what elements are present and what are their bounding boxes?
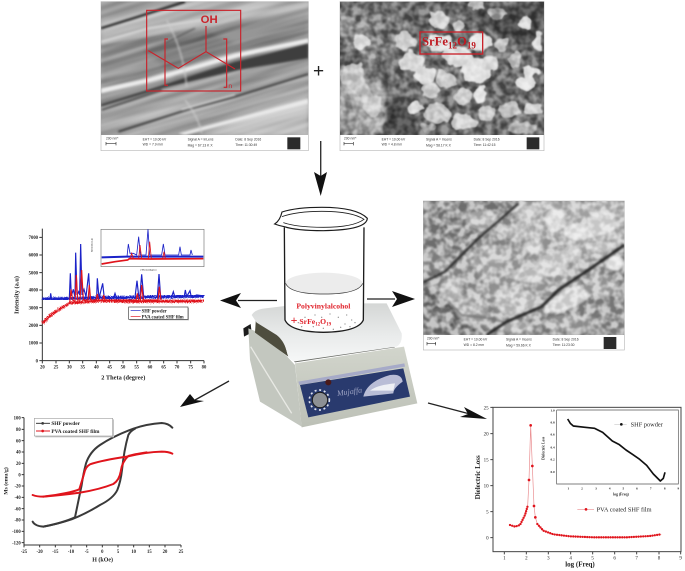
tick labels: 80: [202, 366, 207, 371]
tick labels: 100: [14, 416, 21, 421]
red trace: PVA coated SHF film: [42, 270, 204, 323]
tick labels: [484, 406, 489, 542]
tick labels: -100: [12, 530, 21, 535]
plus sign: +: [313, 61, 324, 82]
tick labels: 60: [16, 439, 21, 444]
axes: [39, 229, 204, 363]
hysteresis loop chart: 10: [131, 550, 137, 555]
tick labels: -120: [12, 541, 21, 546]
tick labels: 7000: [29, 236, 39, 241]
dielectric loss chart: 8: [658, 557, 661, 562]
tick labels: -40: [14, 496, 21, 501]
info bar: EHT = 10.00 kV: [382, 137, 406, 141]
dielectric loss chart: 1: [503, 557, 506, 562]
arrow: down-right to dielectric plot: [428, 403, 487, 419]
tick labels: 30: [67, 366, 72, 371]
tick labels: 20: [16, 462, 21, 467]
info bar: [427, 336, 616, 349]
info bar: WD = 4.8 mm: [382, 143, 402, 147]
inset chart: 0.6: [550, 433, 555, 437]
tick labels: 25: [54, 366, 59, 371]
inset chart: Dielectric Loss: [542, 436, 546, 460]
info bar: Signal A = InLens: [188, 138, 214, 142]
beaker with solution: [275, 207, 367, 332]
PVA chemical structure overlay: [147, 10, 241, 91]
inset XRD chart: 2 Theta (degree): [140, 269, 157, 272]
hysteresis loop chart: -20: [37, 550, 43, 555]
tick labels: 25: [484, 406, 489, 411]
inset chart: 0.4: [550, 445, 555, 449]
info bar: Time: 11:23:30: [553, 343, 575, 347]
formula label: SrFe: [422, 34, 448, 48]
tick labels: 4000: [29, 289, 39, 294]
inset chart: 6: [636, 486, 638, 490]
tick labels: 55: [134, 366, 140, 371]
tick labels: 2000: [29, 324, 39, 329]
hysteresis loop chart: -5: [85, 550, 89, 555]
tick labels: 0: [36, 359, 39, 364]
tick labels: 40: [16, 451, 21, 456]
info bar: Time: 11:30:49: [235, 143, 257, 147]
solution formula: 12: [315, 323, 321, 328]
legend: SHF powder: SHF powder: [631, 422, 664, 429]
legend: SHF powder: [142, 309, 167, 314]
black loop: SHF powder: [33, 423, 172, 527]
tick labels: 6000: [29, 254, 39, 259]
inset chart: 9: [677, 486, 679, 490]
tick labels: 3000: [29, 306, 39, 311]
XRD chart: 2 Theta (degree): [101, 374, 145, 381]
formula label: O: [457, 34, 467, 48]
formula label: 19: [467, 40, 476, 50]
tick labels: 20: [484, 433, 489, 438]
legend: PVA coated SHF film: [142, 315, 184, 320]
tick labels: 50: [121, 366, 126, 371]
info bar: [344, 137, 539, 149]
legend: SHF powder: [614, 422, 664, 429]
inset chart: 7: [650, 486, 652, 490]
solution formula: 19: [326, 323, 332, 328]
tick labels: [12, 416, 21, 546]
formula label: 12: [448, 40, 458, 50]
info bar: Mag = 67.13 K X: [188, 144, 213, 148]
tick labels: 1000: [29, 342, 39, 347]
hot plate stirrer with beaker: [243, 207, 417, 427]
tick labels: 45: [107, 366, 113, 371]
arrow: left to XRD: [220, 293, 277, 308]
axes: [22, 418, 181, 547]
info bar: Signal A = InLens: [506, 337, 532, 341]
tick labels: 15: [484, 459, 489, 464]
legend: PVA coated SHF film: [51, 429, 100, 435]
inset chart: 0.0: [550, 470, 555, 474]
solution formula: O: [320, 317, 326, 326]
info bar: 200 nm*: [427, 336, 440, 340]
axes: [490, 407, 681, 554]
inset chart: 0.8: [550, 421, 555, 425]
info bar: Mag = 58.17 K X: [426, 144, 452, 148]
tick labels: 20: [40, 366, 45, 371]
dielectric loss chart: 2: [525, 557, 528, 562]
tick labels: 70: [175, 366, 180, 371]
dielectric loss chart: 3: [547, 557, 550, 562]
hysteresis loop chart: -15: [52, 550, 59, 555]
hot plate body: [243, 303, 417, 427]
axis titles: Ms (emu/g): [3, 467, 10, 495]
legend: [129, 307, 189, 320]
tick labels: 5: [486, 511, 489, 516]
inset chart: 5: [622, 486, 624, 490]
info bar: 200 nm*: [106, 137, 119, 141]
SEM image: PVA coated film: [423, 201, 624, 350]
XRD chart: [14, 229, 207, 381]
red loop: PVA coated SHF film: [33, 452, 172, 497]
info bar: 200 nm*: [344, 137, 357, 141]
formula label: [420, 32, 483, 54]
inset chart: 1: [567, 486, 569, 490]
solution label: Polyvinylalcohol: [296, 302, 350, 311]
tick labels: -60: [14, 507, 21, 512]
dielectric loss chart: 7: [635, 557, 638, 562]
legend: PVA coated SHF film: PVA coated SHF film: [597, 507, 652, 514]
SEM image: polyvinyl alcohol film: [100, 1, 309, 151]
info bar: WD = 7.9 mm: [143, 143, 163, 147]
tick labels: 40: [94, 366, 99, 371]
blue trace: SHF powder: [42, 244, 204, 299]
info bar: EHT = 10.00 kV: [464, 337, 488, 341]
info bar: Signal A = InLens: [426, 138, 452, 142]
hysteresis loop chart: -25: [21, 550, 28, 555]
tick labels: 75: [188, 366, 194, 371]
PVA chemical structure overlay: n: [228, 83, 232, 90]
inset chart: 4: [609, 486, 611, 490]
inset XRD chart: [91, 229, 204, 272]
hysteresis loop chart: 15: [147, 550, 152, 555]
dielectric loss chart: 4: [569, 557, 572, 562]
info bar: Date: 8 Sep 2016: [235, 138, 261, 142]
arrow: down-left to hysteresis plot: [180, 381, 229, 407]
info bar: WD = 8.2 mm: [464, 343, 484, 347]
solution formula: + SrFe: [291, 313, 315, 327]
inset XRD chart: Intensity (a.u): [91, 238, 94, 252]
hysteresis loop chart: 0: [101, 550, 104, 555]
tick labels: 0: [18, 473, 21, 478]
arrow: down: [314, 141, 327, 196]
info bar: [106, 137, 300, 149]
tick labels: 65: [161, 366, 167, 371]
axis titles: Dielectric Loss: [474, 455, 482, 499]
hot plate body: Mujaffa: [335, 386, 363, 398]
tick labels: [29, 236, 207, 371]
tick labels: 0: [486, 537, 489, 542]
arrow: right to SEM: [367, 291, 415, 307]
PVA chemical structure overlay: OH: [201, 14, 218, 26]
inset chart: 0.2: [550, 458, 555, 462]
tick labels: -20: [14, 485, 21, 490]
tick labels: -80: [14, 519, 21, 524]
hysteresis loop chart: -10: [68, 550, 75, 555]
tick labels: 35: [80, 366, 86, 371]
inset chart: 3: [595, 486, 597, 490]
inset chart: log (Freq): [613, 493, 630, 497]
inset chart: [542, 408, 679, 497]
dielectric loss chart: [474, 406, 682, 568]
legend: SHF powder: [51, 421, 81, 427]
tick labels: 10: [484, 485, 489, 490]
hysteresis loop chart: 5: [117, 550, 120, 555]
inset chart: 8: [664, 486, 666, 490]
tick labels: 80: [16, 428, 21, 433]
axis titles: Intensity (a.u): [14, 276, 21, 314]
hysteresis loop chart: [3, 416, 184, 563]
hysteresis loop chart: H (kOe): [92, 556, 113, 563]
inset chart: 1.0: [550, 408, 555, 412]
dielectric loss chart: log (Freq): [565, 560, 595, 568]
info bar: EHT = 10.00 kV: [143, 137, 167, 141]
dielectric loss chart: 6: [613, 557, 616, 562]
info bar: Date: 8 Sep 2016: [474, 138, 500, 142]
red trace: PVA coated SHF film: [510, 424, 661, 537]
tick labels: 60: [148, 366, 153, 371]
dielectric loss chart: 5: [591, 557, 594, 562]
info bar: Time: 11:42:15: [474, 143, 496, 147]
tick labels: 5000: [29, 271, 39, 276]
hysteresis loop chart: 20: [163, 550, 168, 555]
SEM image: strontium ferrite powder: [340, 0, 544, 151]
info bar: Mag = 59.66 K X: [506, 344, 532, 348]
info bar: Date: 8 Sep 2016: [553, 337, 579, 341]
dielectric loss chart: 9: [679, 557, 682, 562]
hysteresis loop chart: 25: [179, 550, 184, 555]
inset chart: 2: [581, 486, 583, 490]
legend: [34, 418, 114, 437]
